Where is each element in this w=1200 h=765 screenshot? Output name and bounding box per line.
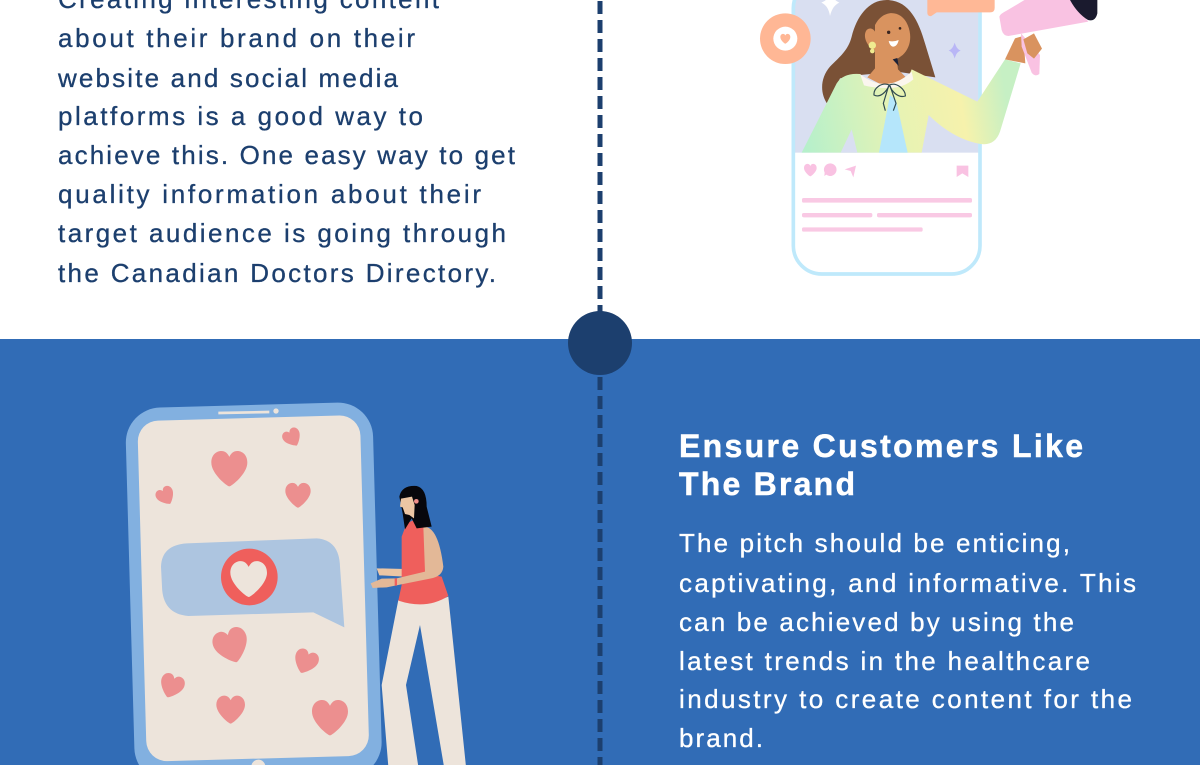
- bow: [874, 84, 905, 111]
- text block: content description: platforms is a good way to: [58, 101, 423, 131]
- like badge: [760, 13, 811, 64]
- timeline node circle: [568, 311, 632, 375]
- eyes and smile: [887, 27, 901, 47]
- blue shirt: [879, 95, 908, 153]
- woman top: [398, 519, 448, 604]
- ear: [414, 499, 419, 504]
- text block: pitch description: industry to create content for the: [679, 684, 1132, 714]
- hand: [1005, 36, 1025, 63]
- speaker and camera: [218, 408, 279, 414]
- megaphone mouth: [1068, 0, 1097, 20]
- phone body: [125, 402, 383, 765]
- phone outline: [793, 0, 980, 274]
- phone screen: [137, 415, 369, 762]
- sparkle white: [821, 0, 839, 16]
- panel: blue lower background: [0, 339, 1200, 765]
- earring: [869, 42, 876, 53]
- megaphone body: [999, 0, 1088, 36]
- heading: Ensure Customers Like The Brand: The Brand: [679, 466, 855, 502]
- text block: content description: about their brand on their: [58, 23, 415, 53]
- woman hair: [399, 486, 432, 529]
- jacket and raised arm: [802, 59, 1021, 153]
- woman hair: [822, 0, 935, 104]
- megaphone handle: [1021, 33, 1040, 75]
- woman neck and face: [865, 13, 910, 87]
- text block: pitch description: latest trends in the healthcare: [679, 646, 1090, 676]
- text block: content description: the Canadian Doctors Directory.: [58, 258, 496, 288]
- illustration: phone with hearts and woman: [125, 402, 466, 765]
- text block: content description: target audience is going through: [58, 218, 506, 248]
- message bubble: [161, 538, 344, 627]
- like badge: [221, 549, 278, 605]
- text block: content description: website and social media: [57, 63, 399, 93]
- fingers: [1023, 33, 1042, 59]
- text block: pitch description: The pitch should be enticing,: [679, 528, 1070, 558]
- dark hair shadow: [893, 58, 899, 66]
- sparkle lavender: [949, 43, 961, 59]
- text block: pitch description: can be achieved by using the: [679, 607, 1074, 637]
- divider: dashed line lower: [598, 377, 602, 765]
- post text lines: [802, 198, 972, 232]
- woman near arm: [371, 527, 443, 588]
- text block: pitch description: brand.: [679, 723, 763, 753]
- text block: content description: [57, 0, 516, 288]
- home button: [251, 760, 265, 765]
- text block: content description: quality information about their: [58, 179, 481, 209]
- heading: Ensure Customers Like The Brand: Ensure Customers Like: [679, 428, 1083, 464]
- text block: pitch description: [679, 528, 1136, 753]
- text block: pitch description: captivating, and informative. This: [679, 568, 1136, 598]
- lavender gap under jacket: [841, 129, 857, 153]
- post area white: [794, 153, 979, 273]
- text block: content description: achieve this. One easy way to get: [58, 140, 516, 170]
- collar: [860, 72, 913, 88]
- divider: dashed line upper: [598, 0, 602, 312]
- phone screen lavender area: [793, 0, 980, 153]
- illustration: influencer with megaphone on phone: [760, 0, 1097, 274]
- woman trousers: [382, 597, 466, 765]
- bracelet: [395, 578, 397, 586]
- heading: Ensure Customers Like The Brand: [679, 428, 1083, 502]
- post icons: [804, 163, 968, 177]
- woman face: [400, 497, 415, 518]
- woman far arm: [377, 568, 405, 577]
- hearts: [154, 426, 348, 735]
- speech bubble peach: [927, 0, 995, 16]
